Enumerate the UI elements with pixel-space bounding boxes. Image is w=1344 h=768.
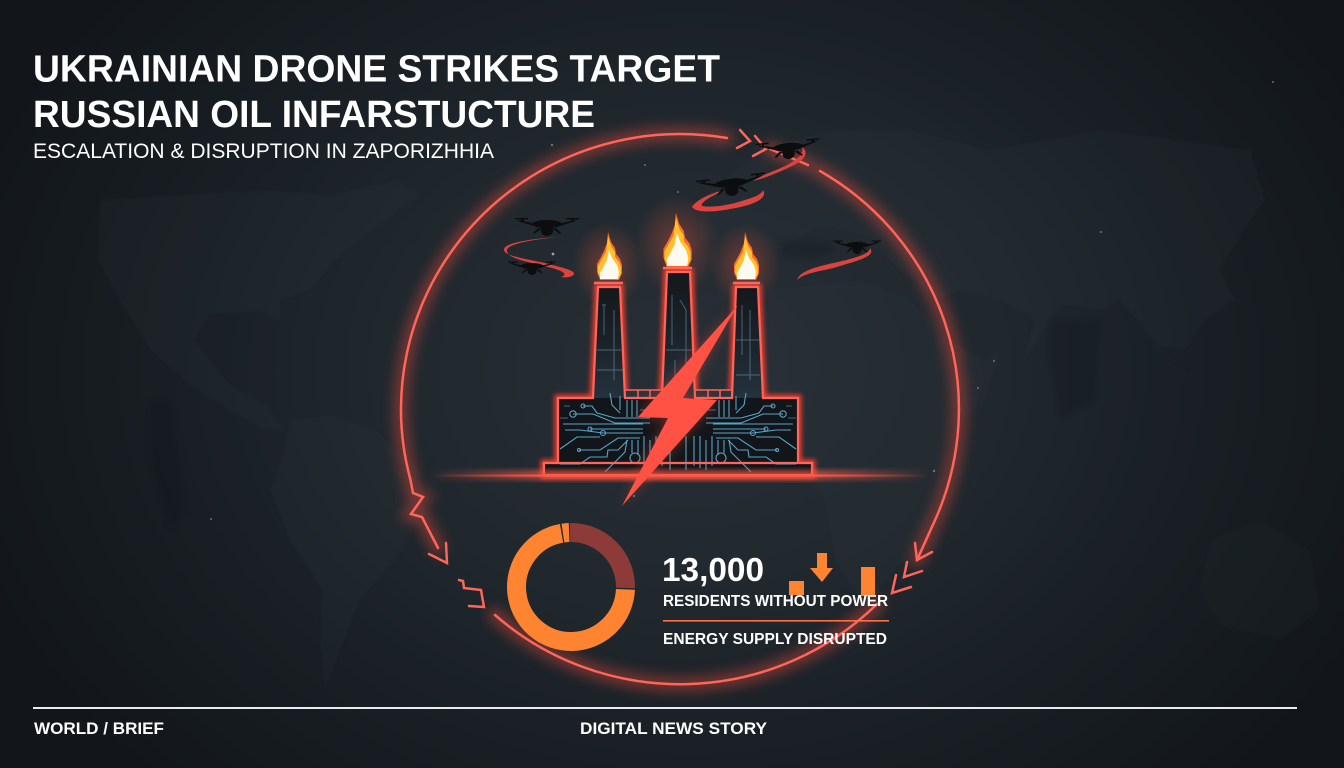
stat divider xyxy=(663,620,889,622)
ring: glow and arcs with arrows xyxy=(401,130,959,684)
title: UKRAINIAN DRONE STRIKES TARGET xyxy=(33,48,720,90)
title: RUSSIAN OIL INFARSTUCTURE xyxy=(33,94,595,136)
horizon line xyxy=(430,470,930,480)
world map xyxy=(98,130,1320,690)
lightning bolt xyxy=(622,305,738,506)
stat block xyxy=(662,551,889,648)
drones with red trails xyxy=(504,138,881,280)
bar icon: tall bar xyxy=(861,567,875,596)
refinery with circuit pattern xyxy=(544,195,812,475)
icon: down arrow xyxy=(810,553,833,582)
footer left label: WORLD / BRIEF xyxy=(34,719,164,738)
label: residents: RESIDENTS WITHOUT POWER xyxy=(663,593,888,610)
footer xyxy=(33,707,1297,738)
label: energy: ENERGY SUPPLY DISRUPTED xyxy=(663,631,887,648)
donut chart xyxy=(517,532,625,642)
footer center label: DIGITAL NEWS STORY xyxy=(580,719,768,738)
title xyxy=(33,48,720,136)
subtitle: ESCALATION & DISRUPTION IN ZAPORIZHHIA xyxy=(33,140,494,163)
flames xyxy=(597,213,759,280)
big number: 13,000 xyxy=(662,551,764,588)
bar icon: small bar xyxy=(789,581,804,595)
